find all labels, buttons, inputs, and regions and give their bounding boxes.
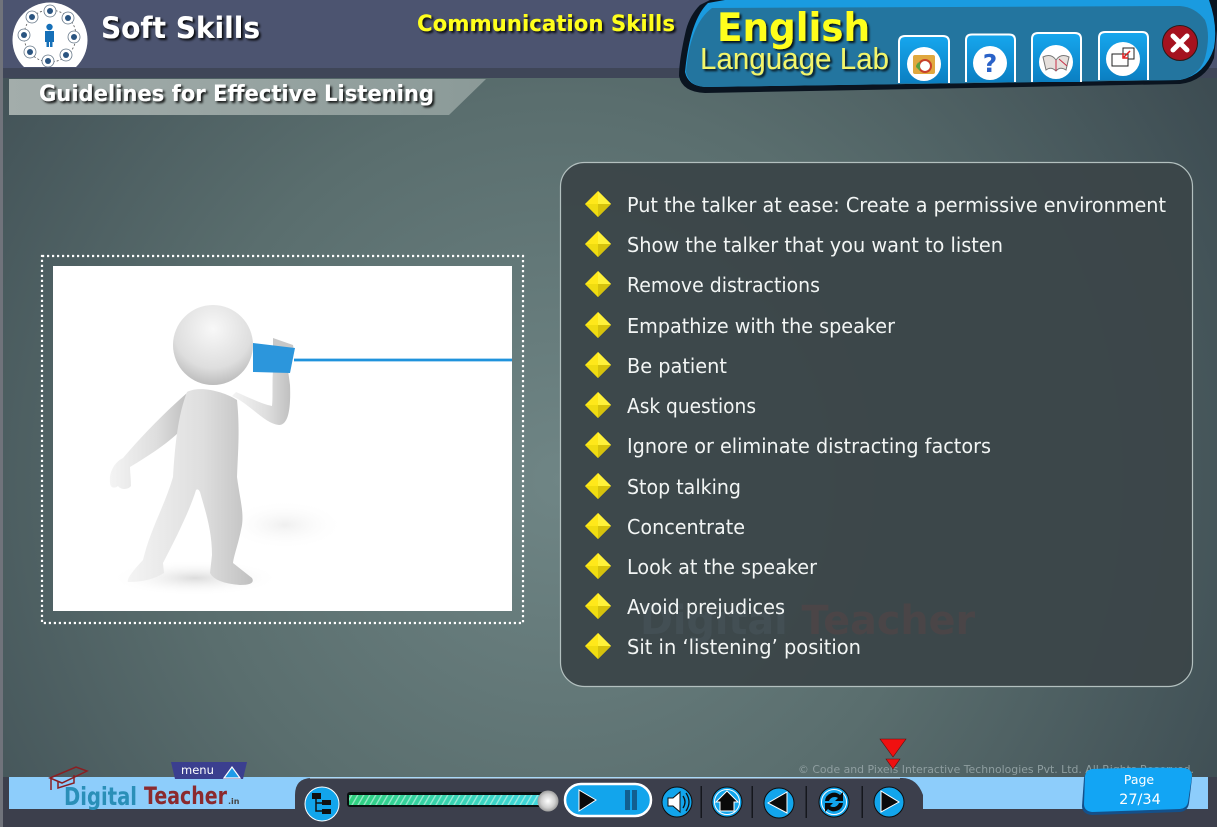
head xyxy=(173,305,253,385)
tin can xyxy=(253,343,295,373)
list item 9 xyxy=(585,513,745,539)
section title banner xyxy=(9,79,486,115)
button: close xyxy=(1162,26,1198,60)
menu tab: menu xyxy=(181,763,214,777)
logo: Digital Teacher: .in xyxy=(228,797,240,806)
list item 9: Concentrate xyxy=(627,515,745,539)
copyright: © Code and Pixels Interactive Technologies Pvt. Ltd. All Rights Reserved. xyxy=(798,764,1194,776)
heading: Soft Skills: Soft Skills xyxy=(101,11,260,45)
button: previous xyxy=(764,788,794,818)
section title text: Guidelines for Effective Listening xyxy=(39,82,434,107)
English Language Lab panel xyxy=(679,0,1217,93)
picture frame xyxy=(42,256,523,623)
button: table of contents xyxy=(305,787,339,821)
left arm xyxy=(110,393,187,489)
list item 1: Put the talker at ease: Create a permissive environment xyxy=(627,193,1166,217)
string xyxy=(294,359,512,361)
list item 6 xyxy=(585,392,756,418)
list item 7: Ignore or eliminate distracting factors xyxy=(627,434,991,458)
list item 3: Remove distractions xyxy=(627,273,820,297)
page counter: 27/34 xyxy=(1119,792,1161,808)
left edge strip xyxy=(0,0,3,827)
label: English: English xyxy=(717,6,870,51)
list item 11: Avoid prejudices xyxy=(627,595,785,619)
button: open book xyxy=(1032,33,1081,82)
list item 6: Ask questions xyxy=(627,394,756,418)
watermark: Digital Teacher xyxy=(640,598,975,644)
player control bar xyxy=(295,778,923,827)
button: replay xyxy=(819,787,849,817)
list item 8: Stop talking xyxy=(627,475,741,499)
logo: Digital Teacher xyxy=(50,767,240,811)
torso and legs xyxy=(128,389,253,585)
button: resize windows xyxy=(1099,32,1148,80)
label: Language Lab: Language Lab xyxy=(700,41,889,76)
list item 8 xyxy=(585,473,741,499)
button: next xyxy=(874,787,904,817)
list item 4: Empathize with the speaker xyxy=(627,314,896,338)
menu tab xyxy=(171,762,247,779)
button: audio xyxy=(662,787,692,817)
raised arm xyxy=(232,370,290,425)
progress bar xyxy=(347,790,558,812)
list item 11 xyxy=(585,593,785,619)
list item 10: Look at the speaker xyxy=(627,555,818,579)
page counter xyxy=(1082,768,1192,815)
picture: figure listening through tin can xyxy=(53,266,512,611)
header bar xyxy=(0,0,1217,78)
page counter: Page xyxy=(1124,772,1154,787)
logo: Digital Teacher: Teacher xyxy=(144,782,227,810)
button: home xyxy=(712,787,742,817)
button: help xyxy=(966,34,1015,82)
button: folder with clock xyxy=(899,36,949,83)
button: help: ? xyxy=(983,49,997,78)
red down arrow indicator xyxy=(880,739,906,769)
footer bar xyxy=(0,777,1217,827)
heading: Communication Skills: Communication Skills xyxy=(417,12,675,37)
list panel xyxy=(560,162,1192,686)
list item 5 xyxy=(585,352,727,378)
toolbar separators xyxy=(700,786,863,818)
logo: Digital Teacher: Digital xyxy=(64,782,137,811)
list item 5: Be patient xyxy=(627,354,727,378)
list item 12: Sit in ‘listening’ position xyxy=(627,635,861,659)
play and pause control xyxy=(565,784,651,816)
fingers xyxy=(273,338,294,351)
icon: soft skills logo xyxy=(12,2,87,67)
list item 2: Show the talker that you want to listen xyxy=(627,233,1003,257)
